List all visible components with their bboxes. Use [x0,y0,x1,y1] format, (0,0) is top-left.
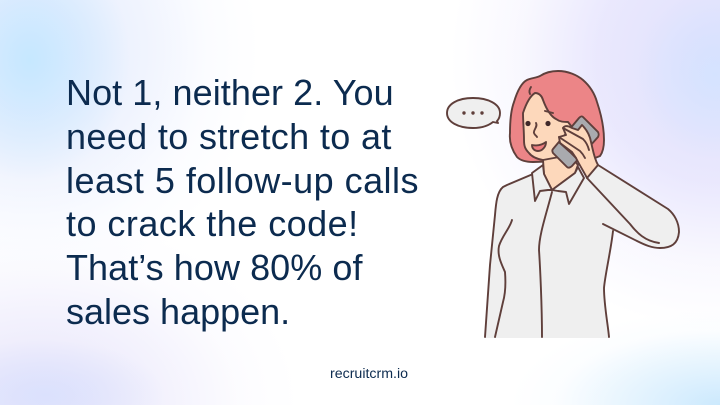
heading: follow-up calls message: need to stretch to at [66,116,392,157]
neck [543,155,578,190]
face [523,87,590,160]
icon: speech bubble [447,98,500,128]
heading: follow-up calls message: That’s how 80% of [66,247,363,288]
heading: follow-up calls message [66,72,419,332]
heading: follow-up calls message: to crack the code! [66,203,359,244]
phone and hand [552,116,599,178]
shirt body [485,165,679,338]
heading: follow-up calls message: least 5 follow-up calls [66,160,419,201]
heading: follow-up calls message: Not 1, neither 2. You [66,72,394,113]
shirt collar [532,165,584,204]
heading: follow-up calls message: sales happen. [66,291,290,332]
footer: website: recruitcrm.io [330,366,408,382]
hair [510,71,604,162]
